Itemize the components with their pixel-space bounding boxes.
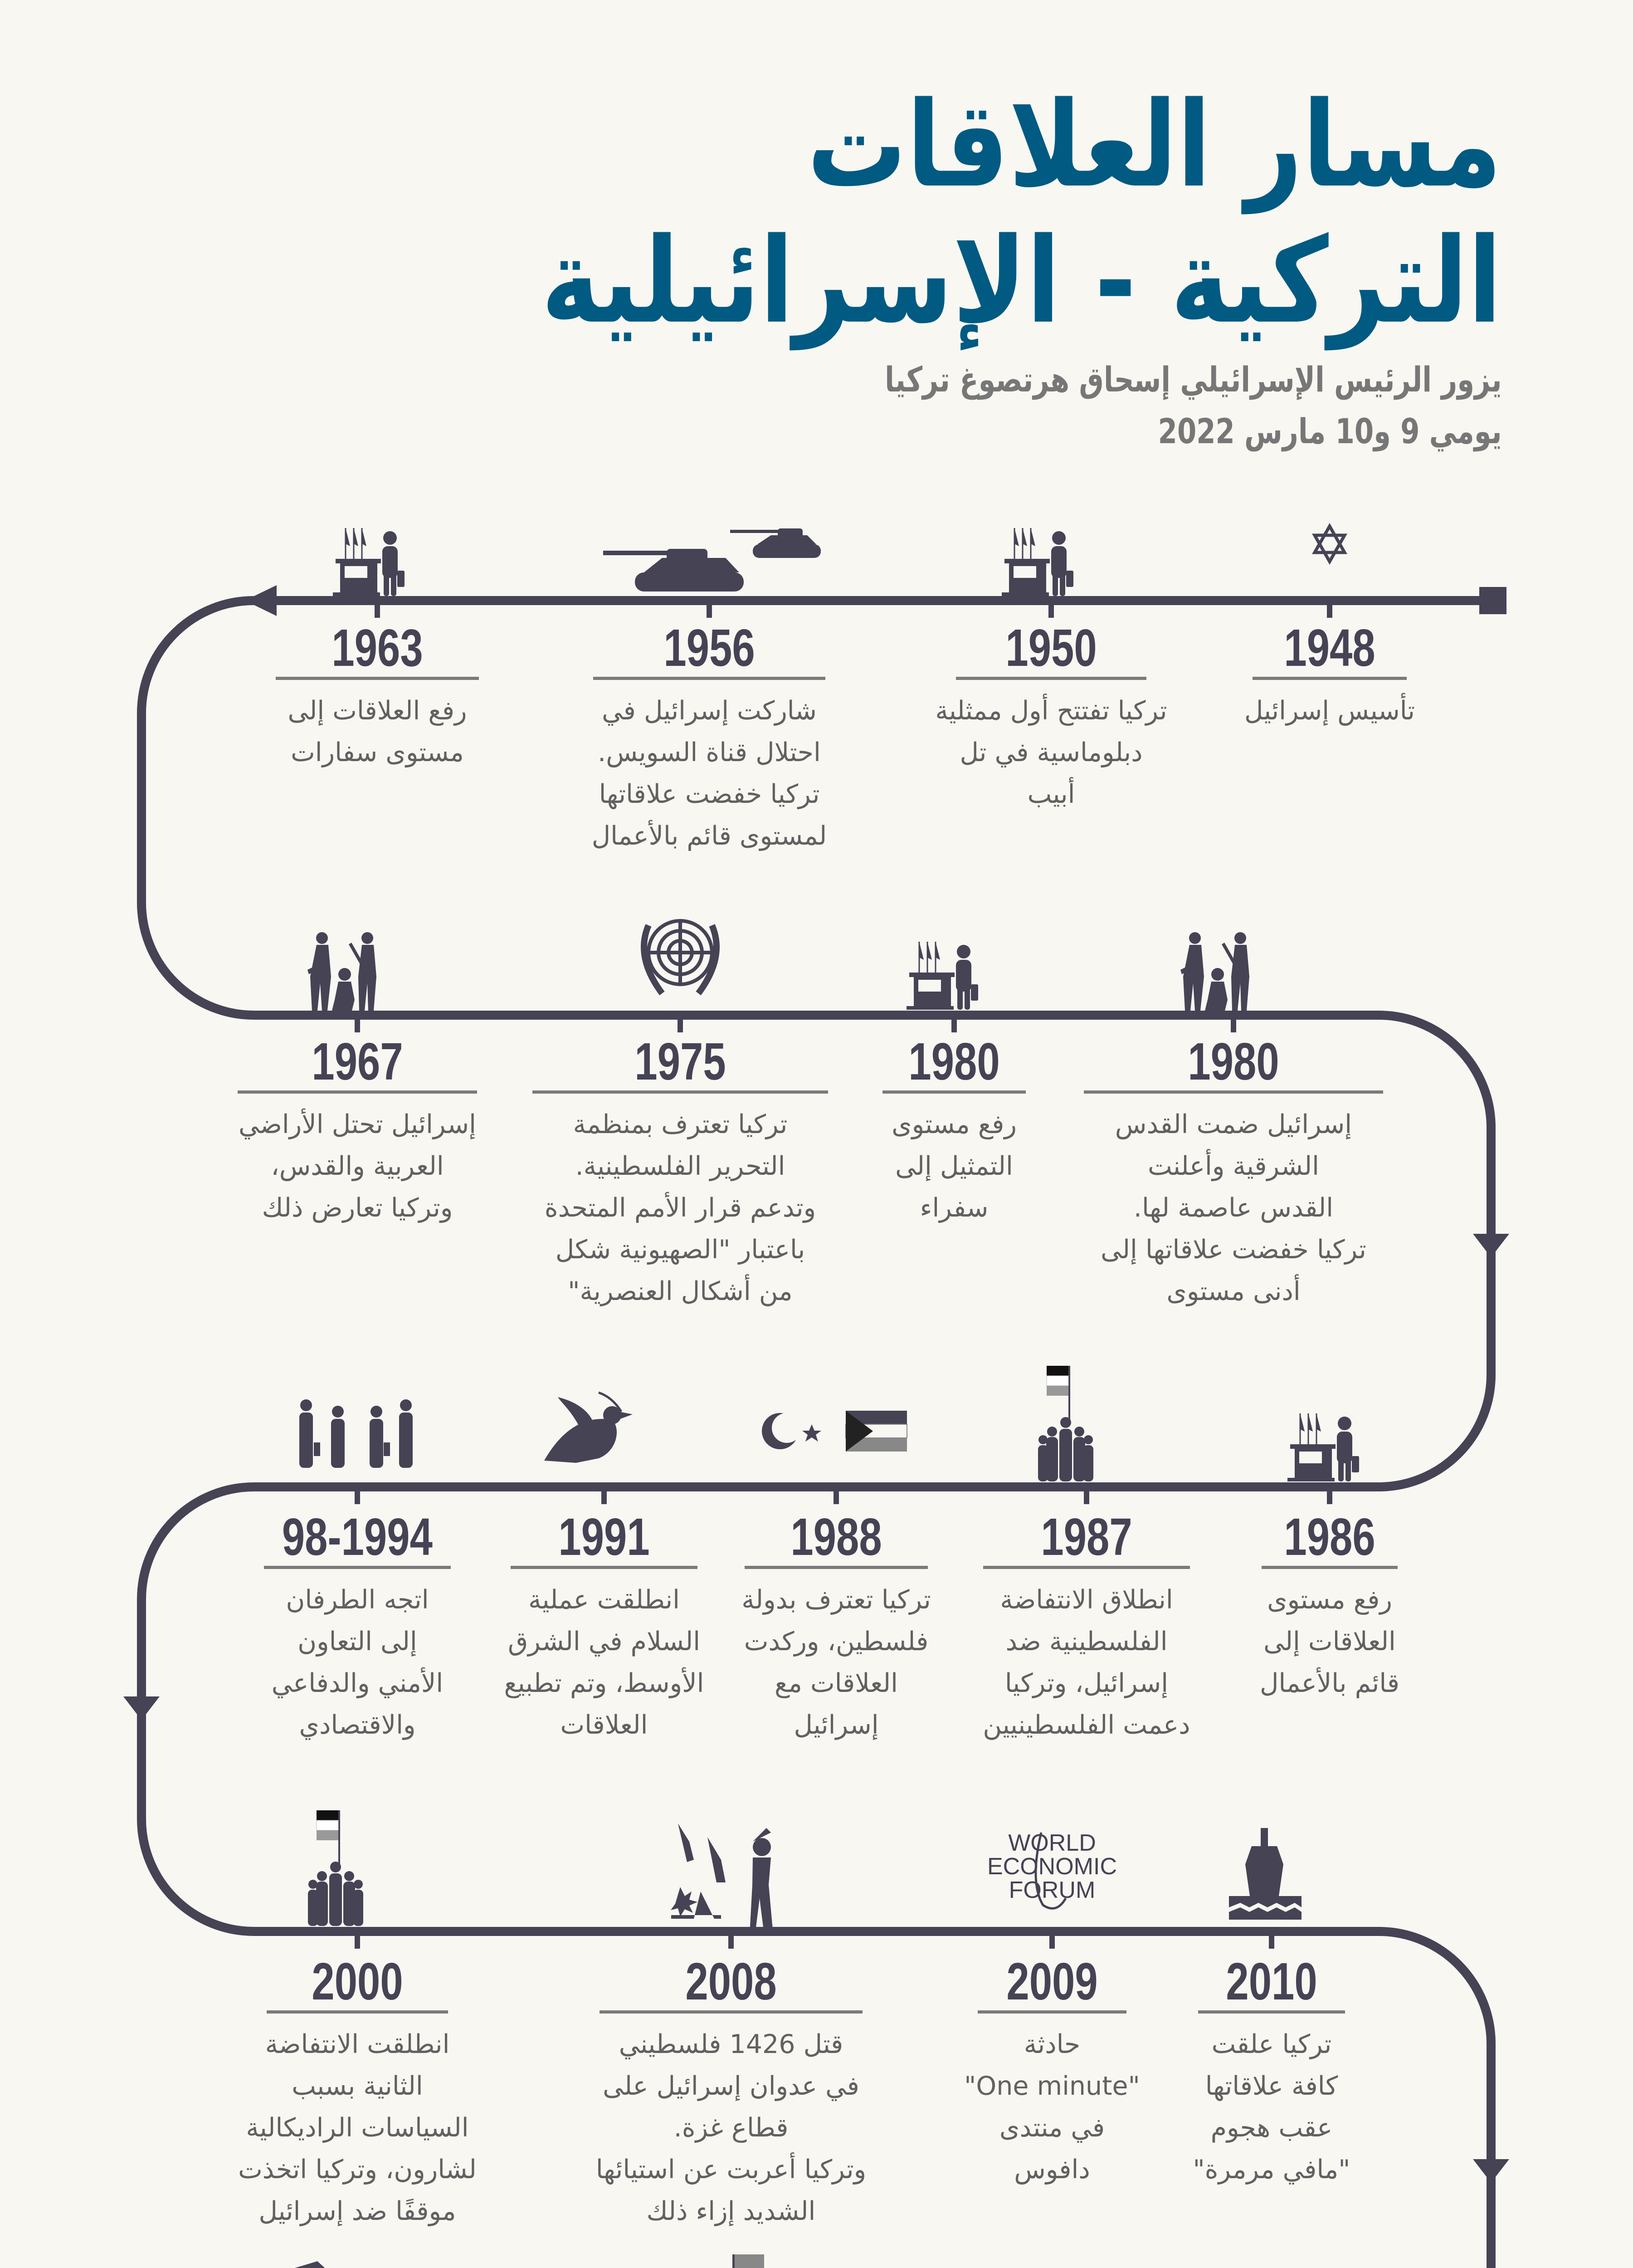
event: 1986: العلاقات إلى — [1263, 1627, 1396, 1657]
event: 1967: إسرائيل تحتل الأراضي — [239, 1110, 476, 1139]
event: 2008: وتركيا أعربت عن استيائها — [596, 2155, 866, 2185]
event: 2009: "One minute" — [964, 2071, 1140, 2101]
event: 1980 (right): الشرقية وأعلنت — [1148, 1151, 1319, 1181]
event: 2009: حادثة — [1024, 2029, 1080, 2059]
event: 1956: 1956 — [663, 618, 755, 677]
event: 1988: 1988 — [790, 1507, 882, 1566]
event: 1967: وتركيا تعارض ذلك — [262, 1193, 453, 1223]
event: 2000: موقفًا ضد إسرائيل — [258, 2196, 456, 2226]
event: 2010: كافة علاقاتها — [1205, 2071, 1338, 2101]
event: 1980: التمثيل إلى — [895, 1151, 1013, 1181]
event: 1987 — [882, 1511, 1291, 1746]
icon: four men 1994-98 — [299, 1399, 413, 1468]
event: 1980: سفراء — [920, 1193, 988, 1223]
title — [541, 77, 1502, 349]
event: 1980: 1980 — [908, 1032, 1000, 1091]
event: 1950: 1950 — [1005, 618, 1097, 677]
icon: dove 1991 — [544, 1393, 633, 1463]
icon: World Economic Forum logo 2009 — [987, 1830, 1117, 1908]
event: 1980: رفع مستوى — [892, 1110, 1017, 1139]
event: 1975: 1975 — [634, 1032, 726, 1091]
event: 2008: قطاع غزة. — [674, 2113, 788, 2143]
event: 1975: تركيا تعترف بمنظمة — [573, 1110, 787, 1139]
event: 1975: من أشكال العنصرية" — [568, 1276, 793, 1306]
icon: soldiers 1980 — [1180, 932, 1249, 1011]
event: 2009 — [848, 1956, 1256, 2190]
arrow: right down row 2 — [1473, 1234, 1509, 1257]
event: 1956: لمستوى قائم بالأعمال — [592, 821, 827, 851]
event: 2010: 2010 — [1226, 1952, 1317, 2011]
event: 1994-98: إلى التعاون — [297, 1627, 417, 1657]
event: 1987: انطلاق الانتفاضة — [1000, 1585, 1173, 1615]
event: 1975: وتدعم قرار الأمم المتحدة — [545, 1193, 816, 1223]
event: 2000: انطلقت الانتفاضة — [265, 2029, 449, 2059]
icon: World Economic Forum logo 2009: FORUM — [1009, 1877, 1095, 1903]
event: 1994-98: اتجه الطرفان — [286, 1585, 429, 1615]
event: 1956 — [505, 622, 913, 857]
event: 2009: في منتدى — [999, 2113, 1105, 2143]
arrow: right down row 4 — [1473, 2159, 1509, 2183]
event: 2000: الثانية بسبب — [292, 2071, 423, 2101]
event: 1963: مستوى سفارات — [291, 738, 464, 767]
event: 1963 — [173, 622, 581, 773]
event: 2010: "مافي مرمرة" — [1193, 2155, 1350, 2185]
event: 1988: العلاقات مع — [775, 1668, 898, 1698]
arrow: row 1 left — [245, 585, 277, 616]
event: 2010 — [1068, 1956, 1476, 2190]
icon: ship 2010 — [1229, 1828, 1302, 1920]
icon: UN emblem 1975 — [644, 921, 717, 993]
event: 1967: 1967 — [312, 1032, 403, 1091]
event: 1980 (right): تركيا خفضت علاقاتها إلى — [1101, 1235, 1366, 1265]
arrow: left down row 3 — [123, 1696, 160, 1720]
event: 2000 — [153, 1956, 561, 2232]
event: 2008: في عدوان إسرائيل على — [603, 2071, 859, 2101]
event: 1980 (right): أدنى مستوى — [1166, 1276, 1301, 1306]
icon: star of David 1948 — [1315, 526, 1345, 562]
event: 1975: التحرير الفلسطينية. — [575, 1151, 785, 1181]
event: 2009: دافوس — [1014, 2155, 1090, 2185]
event: 1986: رفع مستوى — [1267, 1585, 1392, 1615]
event: 1991 — [400, 1511, 808, 1746]
event: 1991: الأوسط، وتم تطبيع — [504, 1668, 704, 1698]
event: 2009: 2009 — [1006, 1952, 1098, 2011]
event: 1967: العربية والقدس، — [271, 1151, 444, 1181]
title: مسار العلاقات — [807, 77, 1502, 214]
event: 1991: انطلقت عملية — [528, 1585, 680, 1615]
event: 1986: قائم بالأعمال — [1260, 1668, 1399, 1698]
event: 1987: الفلسطينية ضد — [1005, 1627, 1168, 1657]
event: 1994-98 — [153, 1511, 561, 1746]
event: 1948: 1948 — [1284, 618, 1375, 677]
event: 1980 (right): إسرائيل ضمت القدس — [1115, 1110, 1352, 1139]
event: 1950 — [847, 622, 1255, 815]
event: 2008: قتل 1426 فلسطيني — [619, 2029, 843, 2059]
icon: World Economic Forum logo 2009: WORLD — [1008, 1830, 1096, 1856]
icon: explosion 2008 — [671, 1823, 773, 1935]
icon: US embassy building 2017 — [635, 2254, 830, 2268]
subtitle — [885, 354, 1502, 457]
event: 1956: شاركت إسرائيل في — [602, 696, 817, 726]
event: 1991: العلاقات — [561, 1710, 648, 1740]
event: 1994-98: الأمني والدفاعي — [272, 1668, 443, 1698]
event: 1988: فلسطين، وركدت — [744, 1627, 928, 1657]
event: 2008: 2008 — [685, 1952, 777, 2011]
icon: ballot box 2021 — [295, 2261, 408, 2268]
icon: tanks 1956 — [603, 528, 821, 591]
event: 1988: تركيا تعترف بدولة — [741, 1585, 931, 1615]
event: 1948 — [1126, 622, 1534, 732]
event: 2008: الشديد إزاء ذلك — [647, 2196, 815, 2226]
icon: soldiers 1967 — [307, 932, 376, 1011]
event: 1986 — [1126, 1511, 1534, 1704]
event: 1986: 1986 — [1284, 1507, 1375, 1566]
icon: embassy 1950 — [1002, 528, 1073, 596]
event: 1956: تركيا خفضت علاقاتها — [599, 779, 819, 809]
event: 2000: 2000 — [312, 1952, 403, 2011]
event: 1988 — [632, 1511, 1040, 1746]
event: 1980 (right): القدس عاصمة لها. — [1134, 1193, 1333, 1223]
event: 1963: رفع العلاقات إلى — [288, 696, 467, 726]
event: 2000: لشارون، وتركيا اتخذت — [238, 2155, 477, 2185]
icon: embassy 1986 — [1287, 1413, 1359, 1481]
event: 1991: 1991 — [558, 1507, 650, 1566]
event: 1988: إسرائيل — [794, 1710, 879, 1740]
event: 1975 — [476, 1036, 884, 1312]
event: 2008 — [527, 1956, 935, 2232]
icon: crowd with flag 2000 — [308, 1810, 363, 1926]
title: التركية - الإسرائيلية — [541, 213, 1502, 350]
event: 1950: تركيا تفتتح أول ممثلية — [935, 696, 1167, 726]
event: 1994-98: والاقتصادي — [299, 1710, 416, 1740]
event: 1994-98: 98-1994 — [282, 1507, 433, 1566]
event: 1987: دعمت الفلسطينيين — [983, 1710, 1190, 1740]
event: 1956: احتلال قناة السويس. — [598, 738, 821, 767]
event: 1987: 1987 — [1041, 1507, 1132, 1566]
icon: World Economic Forum logo 2009: ECONOMIC — [987, 1853, 1117, 1880]
end square — [1479, 587, 1506, 614]
icon: crowd with flag 1987 — [1038, 1366, 1093, 1481]
icon: crescent, star and Palestinian flag 1988 — [762, 1411, 907, 1452]
event: 2010: تركيا علقت — [1212, 2029, 1331, 2059]
event: 1950: دبلوماسية في تل — [960, 738, 1143, 767]
event: 2000: السياسات الراديكالية — [246, 2113, 469, 2143]
icon: embassy 1980 — [907, 942, 978, 1010]
event: 1980 (right) — [1029, 1036, 1438, 1312]
event: 1980 (right): 1980 — [1188, 1032, 1279, 1091]
event: 1967 — [153, 1036, 561, 1229]
subtitle: يزور الرئيس الإسرائيلي إسحاق هرتصوغ تركيا — [885, 359, 1502, 400]
event: 1950: أبيب — [1028, 779, 1075, 809]
subtitle: يومي 9 و10 مارس 2022 — [1158, 411, 1502, 451]
icon: embassy 1963 — [333, 528, 405, 596]
event: 2010: عقب هجوم — [1211, 2113, 1332, 2143]
event: 1980 — [750, 1036, 1158, 1229]
event: 1948: تأسيس إسرائيل — [1244, 696, 1415, 726]
event: 1975: باعتبار "الصهيونية شكل — [556, 1235, 805, 1265]
event: 1963: 1963 — [331, 618, 423, 677]
event: 1987: إسرائيل، وتركيا — [1005, 1668, 1168, 1698]
event: 1991: السلام في الشرق — [508, 1627, 700, 1657]
